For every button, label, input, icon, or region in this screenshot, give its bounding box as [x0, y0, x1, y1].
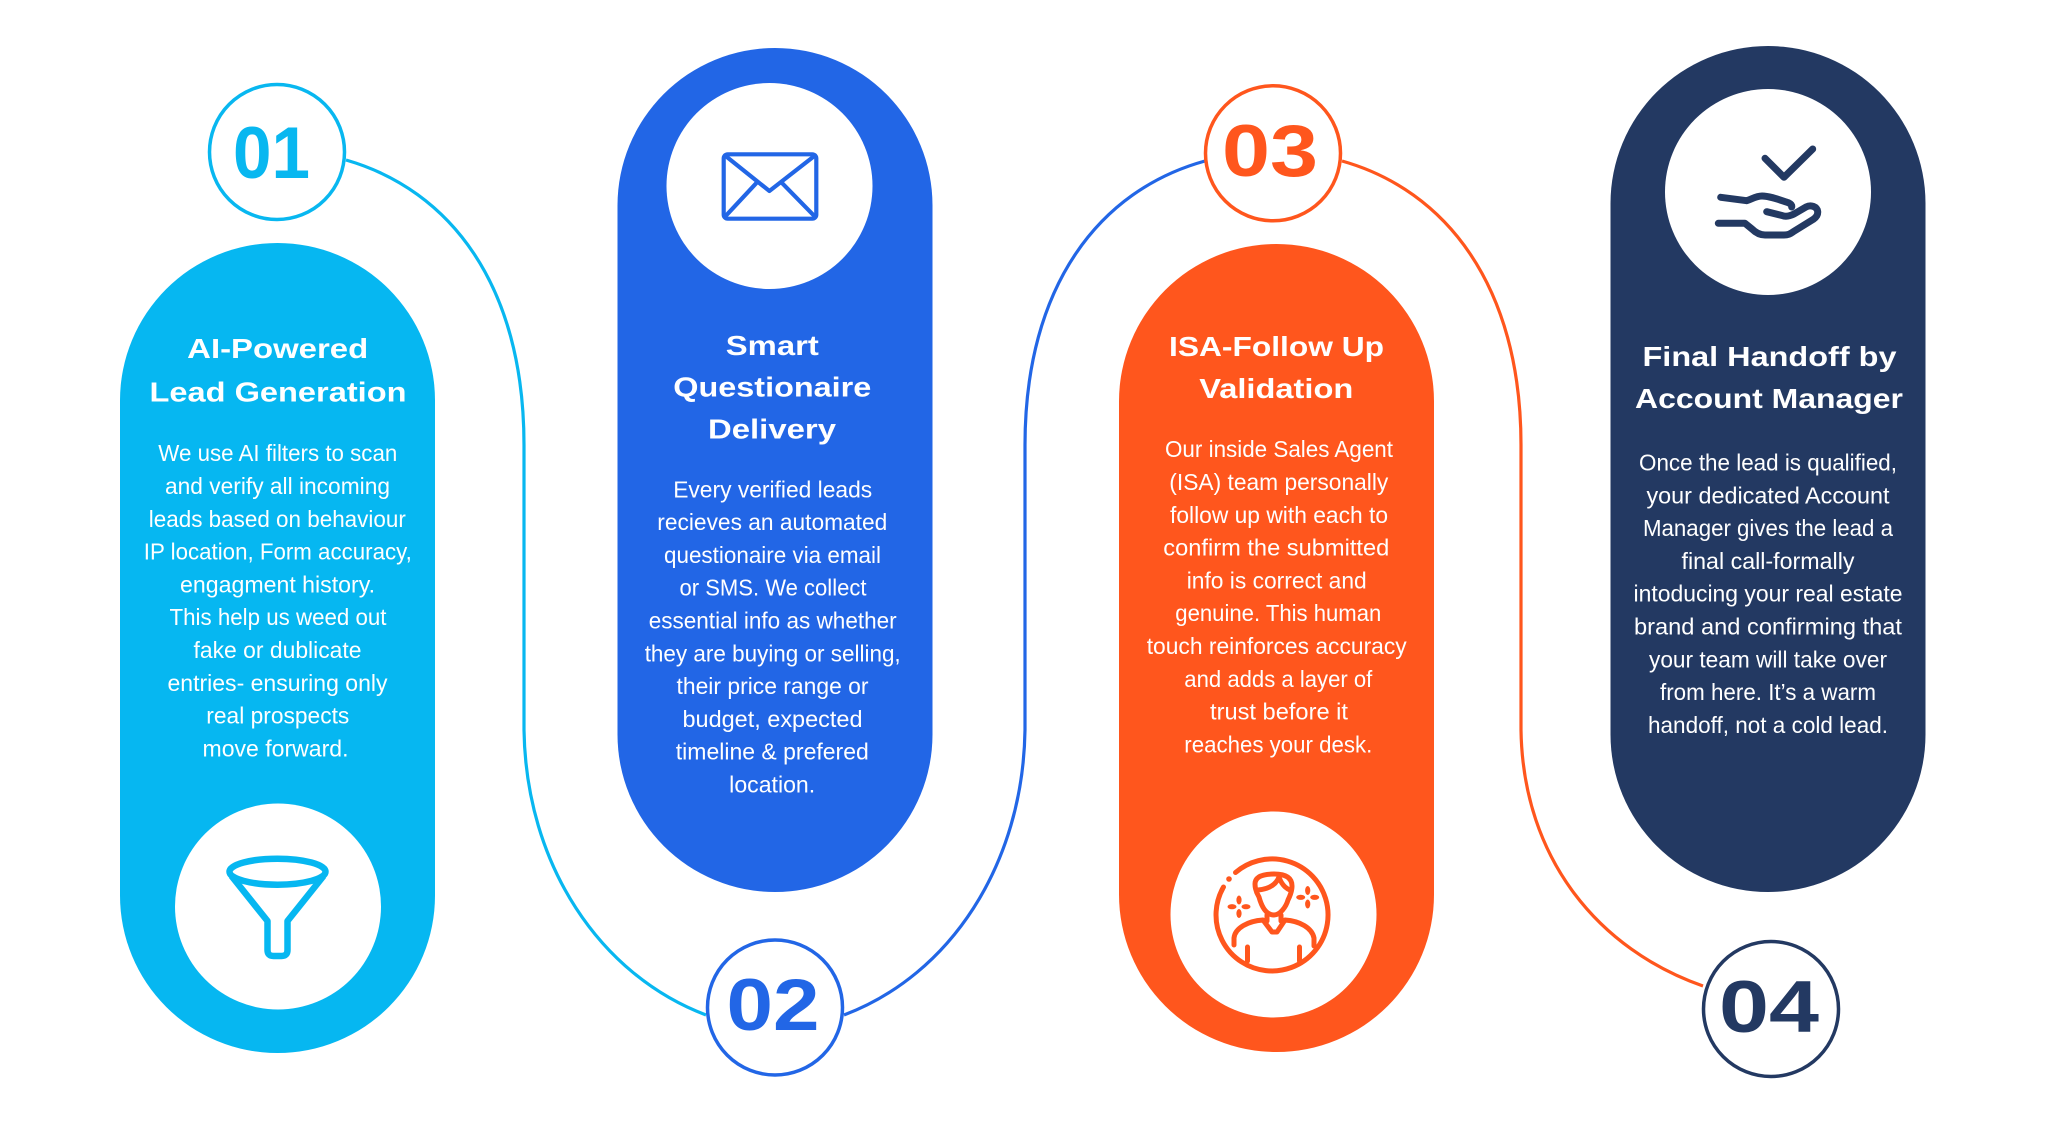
heading: Lead Generation — [150, 377, 406, 408]
heading: ISA-Follow Up — [1169, 331, 1384, 362]
number badge 04 — [1704, 942, 1838, 1076]
number badge 03 — [1206, 86, 1340, 221]
heading: Questionaire — [673, 372, 871, 403]
body text: We use AI filters to scan — [158, 440, 397, 466]
body text: location. — [729, 772, 815, 798]
number badge 01 — [210, 84, 344, 220]
pill background — [1119, 244, 1434, 1052]
heading: Smart — [726, 330, 819, 361]
heading: AI-Powered — [187, 333, 368, 364]
heading: Final Handoff by — [1642, 341, 1897, 372]
icon: person — [1170, 812, 1376, 1018]
heading: Delivery — [708, 413, 836, 444]
icon: funnel — [175, 804, 381, 1010]
body text: reaches your desk. — [1184, 731, 1372, 757]
body text: fake or dublicate — [194, 637, 362, 663]
body text: and adds a layer of — [1184, 666, 1373, 692]
body text: from here. It’s a warm — [1660, 679, 1876, 705]
pill background — [120, 243, 435, 1053]
heading: Account Manager — [1635, 383, 1903, 414]
body text: (ISA) team personally — [1169, 469, 1389, 495]
heading — [673, 330, 871, 444]
body text: or SMS. We collect — [680, 575, 867, 601]
heading — [1635, 341, 1903, 414]
body text: Once the lead is qualified, — [1639, 450, 1897, 476]
pill background — [1610, 46, 1926, 892]
body text: genuine. This human — [1175, 600, 1381, 626]
body text: intoducing your real estate — [1634, 581, 1902, 607]
body text — [1147, 436, 1407, 757]
panel: Final Handoff by Account Manager — [1610, 46, 1926, 892]
panel: ISA-Follow Up Validation — [1119, 244, 1434, 1052]
body text: brand and confirming that — [1634, 614, 1903, 640]
body text: entries- ensuring only — [168, 670, 388, 696]
body text: This help us weed out — [170, 604, 387, 630]
heading — [150, 333, 406, 408]
body text: budget, expected — [682, 706, 862, 732]
body text: your team will take over — [1649, 646, 1887, 672]
body text — [1634, 450, 1903, 738]
body text: final call-formally — [1682, 548, 1855, 574]
number badge 01: 01 — [233, 113, 310, 194]
body text: IP location, Form accuracy, — [144, 539, 412, 565]
body text: your dedicated Account — [1646, 482, 1890, 508]
connector: step 1 to step 2 — [346, 160, 706, 1015]
connector: step 3 to step 4 — [1342, 161, 1703, 986]
body text: Our inside Sales Agent — [1165, 436, 1394, 462]
icon: envelope — [666, 83, 872, 289]
body text — [645, 476, 901, 798]
body text: recieves an automated — [657, 509, 887, 535]
body text: Manager gives the lead a — [1643, 515, 1893, 541]
number badge 04: 04 — [1719, 967, 1819, 1048]
body text: Every verified leads — [673, 476, 872, 502]
body text: engagment history. — [180, 571, 375, 597]
body text: they are buying or selling, — [645, 640, 901, 666]
body text — [144, 440, 412, 761]
body text: essential info as whether — [649, 608, 897, 634]
body text: touch reinforces accuracy — [1147, 633, 1407, 659]
number badge 02 — [708, 940, 842, 1075]
body text: questionaire via email — [664, 542, 881, 568]
body text: follow up with each to — [1170, 502, 1388, 528]
body text: their price range or — [676, 673, 869, 699]
body text: real prospects — [206, 703, 349, 729]
heading: Validation — [1199, 373, 1353, 404]
icon: hand with check — [1665, 89, 1871, 295]
number badge 03: 03 — [1222, 111, 1318, 192]
body text: timeline & prefered — [676, 739, 869, 765]
body text: info is correct and — [1187, 567, 1367, 593]
body text: and verify all incoming — [165, 473, 390, 499]
body text: handoff, not a cold lead. — [1648, 712, 1888, 738]
body text: confirm the submitted — [1163, 535, 1389, 561]
connector: step 2 to step 3 — [844, 161, 1205, 1015]
number badge 02: 02 — [726, 965, 820, 1046]
panel: Smart Questionaire Delivery — [618, 48, 932, 892]
body text: trust before it — [1210, 699, 1349, 725]
heading — [1169, 331, 1384, 404]
body text: leads based on behaviour — [149, 506, 406, 532]
body text: move forward. — [202, 735, 348, 761]
pill background — [618, 48, 932, 892]
panel: AI-Powered Lead Generation — [120, 243, 435, 1053]
